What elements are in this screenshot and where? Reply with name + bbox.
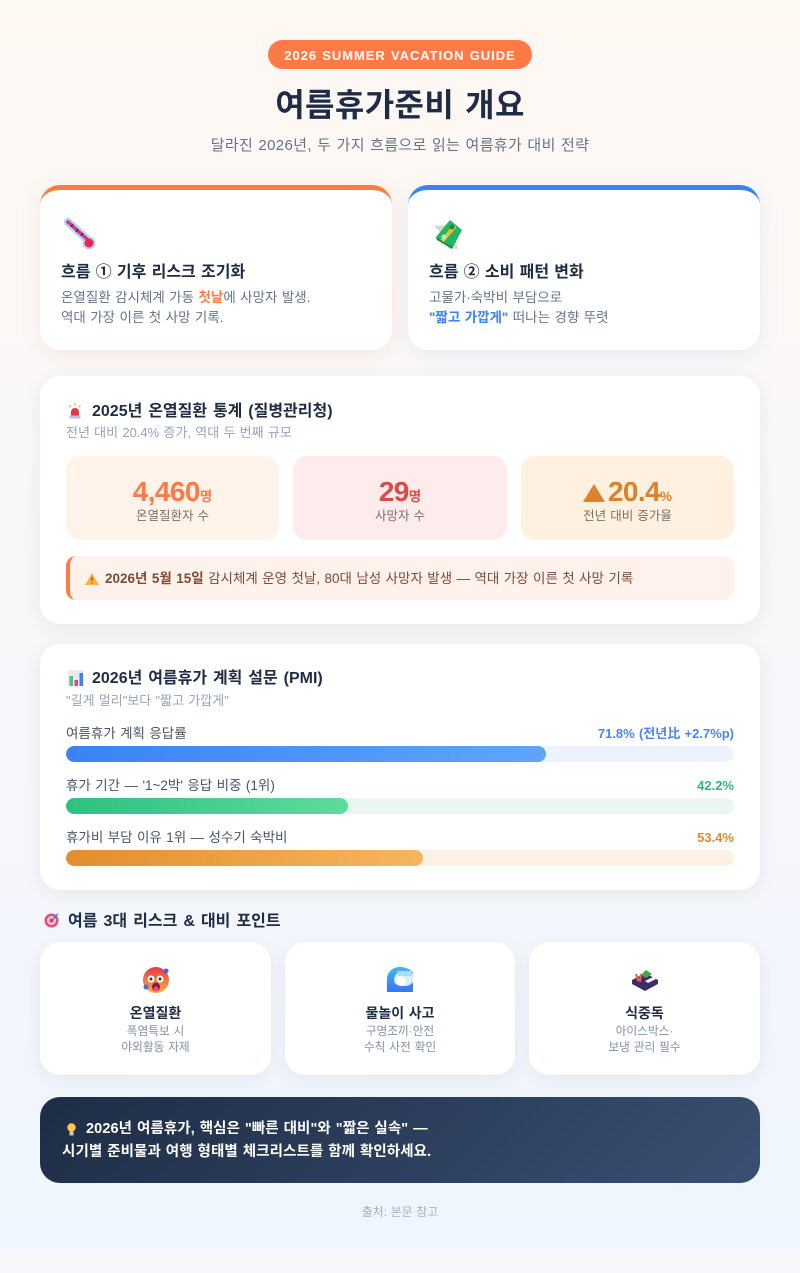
stat: deaths: [293, 456, 507, 540]
bar value: cost: 53.4%: [697, 830, 734, 845]
icon: siren: [69, 403, 81, 418]
bar chart: response rate: [66, 746, 734, 762]
value: 4,460: 4,460명: [133, 476, 212, 507]
text: flow 2 description: "짧고 가깝게" 떠나는 경향 뚜렷: [429, 310, 609, 325]
icon: flying money: [434, 220, 462, 249]
title: 여름휴가준비 개요: [275, 87, 525, 123]
icon: bento box: [632, 970, 658, 991]
section heading: risks: [44, 912, 281, 930]
heading: flow 1: 흐름 ① 기후 리스크 조기화: [61, 264, 245, 281]
icon: wave: [387, 967, 413, 992]
text: flow 1 description: 역대 가장 이른 첫 사망 기록.: [61, 310, 224, 325]
panel: vacation survey: [40, 644, 760, 890]
heading: statistics: 2025년 온열질환 통계 (질병관리청): [92, 403, 333, 420]
panel: flow 1 climate risk: [40, 185, 392, 350]
bar value: response rate: 71.8% (전년比 +2.7%p): [598, 726, 734, 741]
heading: heat illness: 온열질환: [130, 1005, 181, 1021]
text: section heading: 여름 3대 리스크 & 대비 포인트: [68, 913, 281, 930]
text: heat illness tip: 폭염특보 시: [127, 1025, 184, 1038]
subtitle: 달라진 2026년, 두 가지 흐름으로 읽는 여름휴가 대비 전략: [211, 137, 589, 154]
label: increase rate: 전년 대비 증가율: [583, 509, 672, 523]
heading: food poisoning: 식중독: [625, 1005, 664, 1021]
bar label: duration: 휴가 기간 — '1~2박' 응답 비중 (1위): [66, 778, 275, 793]
text: food poisoning tip: 보냉 관리 필수: [608, 1041, 681, 1054]
heading: water accident: 물놀이 사고: [366, 1005, 434, 1021]
stat: patients: [66, 456, 279, 540]
text: flow 1 description: 온열질환 감시체계 가동 첫날에 사망자 발생.: [61, 290, 310, 305]
bar chart: duration: [66, 798, 734, 814]
badge: [268, 40, 532, 69]
text: flow 1 description: [61, 290, 310, 325]
text: heat illness tip: 야외활동 자제: [121, 1041, 190, 1054]
text: callout: 2026년 5월 15일 감시체계 운영 첫날, 80대 남성 사망자 발생 — 역대 가장 이른 첫 사망 기록: [105, 571, 633, 586]
text: takeaway: 시기별 준비물과 여행 형태별 체크리스트를 함께 확인하세요.: [62, 1144, 431, 1160]
icon: bar chart: [68, 670, 84, 686]
stat: increase rate: [521, 456, 734, 540]
value: 29: 29명: [379, 476, 421, 507]
text: takeaway: [62, 1120, 431, 1160]
bar chart: cost: [66, 850, 734, 866]
banner: key takeaway: [40, 1097, 760, 1183]
badge: 2026 SUMMER VACATION GUIDE: [284, 48, 516, 63]
card: heat illness: [40, 942, 271, 1075]
text: flow 2 description: 고물가·숙박비 부담으로: [429, 290, 562, 305]
text: water accident tip: 수칙 사전 확인: [364, 1041, 436, 1054]
panel: heat illness statistics: [40, 376, 760, 624]
icon: target: [44, 914, 58, 928]
heading: survey: 2026년 여름휴가 계획 설문 (PMI): [92, 670, 323, 687]
text: water accident tip: [364, 1024, 436, 1054]
icon: light bulb: [67, 1123, 76, 1136]
callout: first death: [66, 556, 734, 600]
icon: thermometer: [64, 218, 96, 250]
source note: 출처: 본문 참고: [362, 1205, 438, 1219]
text: heat illness tip: [121, 1025, 190, 1054]
text: flow 2 description: [429, 290, 609, 325]
text: food poisoning tip: [608, 1025, 681, 1054]
icon: hot face: [143, 967, 169, 993]
subheading: survey: "길게 멀리"보다 "짧고 가깝게": [66, 693, 229, 708]
card: food poisoning: [529, 942, 760, 1075]
text: takeaway: 2026년 여름휴가, 핵심은 "빠른 대비"와 "짧은 실속" —: [86, 1121, 428, 1137]
text: food poisoning tip: 아이스박스·: [616, 1025, 673, 1038]
label: patients: 온열질환자 수: [136, 509, 209, 523]
text: water accident tip: 구명조끼·안전: [366, 1025, 434, 1038]
label: deaths: 사망자 수: [375, 509, 425, 523]
bar value: duration: 42.2%: [697, 778, 734, 793]
value: 20.4%: 20.4%: [608, 476, 672, 507]
bar label: response rate: 여름휴가 계획 응답률: [66, 726, 187, 741]
icon: warning: [85, 573, 99, 585]
panel: flow 2 spending change: [408, 185, 760, 350]
bar label: cost: 휴가비 부담 이유 1위 — 성수기 숙박비: [66, 830, 287, 845]
card: water accident: [285, 942, 515, 1075]
subheading: statistics: 전년 대비 20.4% 증가, 역대 두 번째 규모: [66, 425, 292, 440]
heading: flow 2: 흐름 ② 소비 패턴 변화: [429, 264, 584, 281]
